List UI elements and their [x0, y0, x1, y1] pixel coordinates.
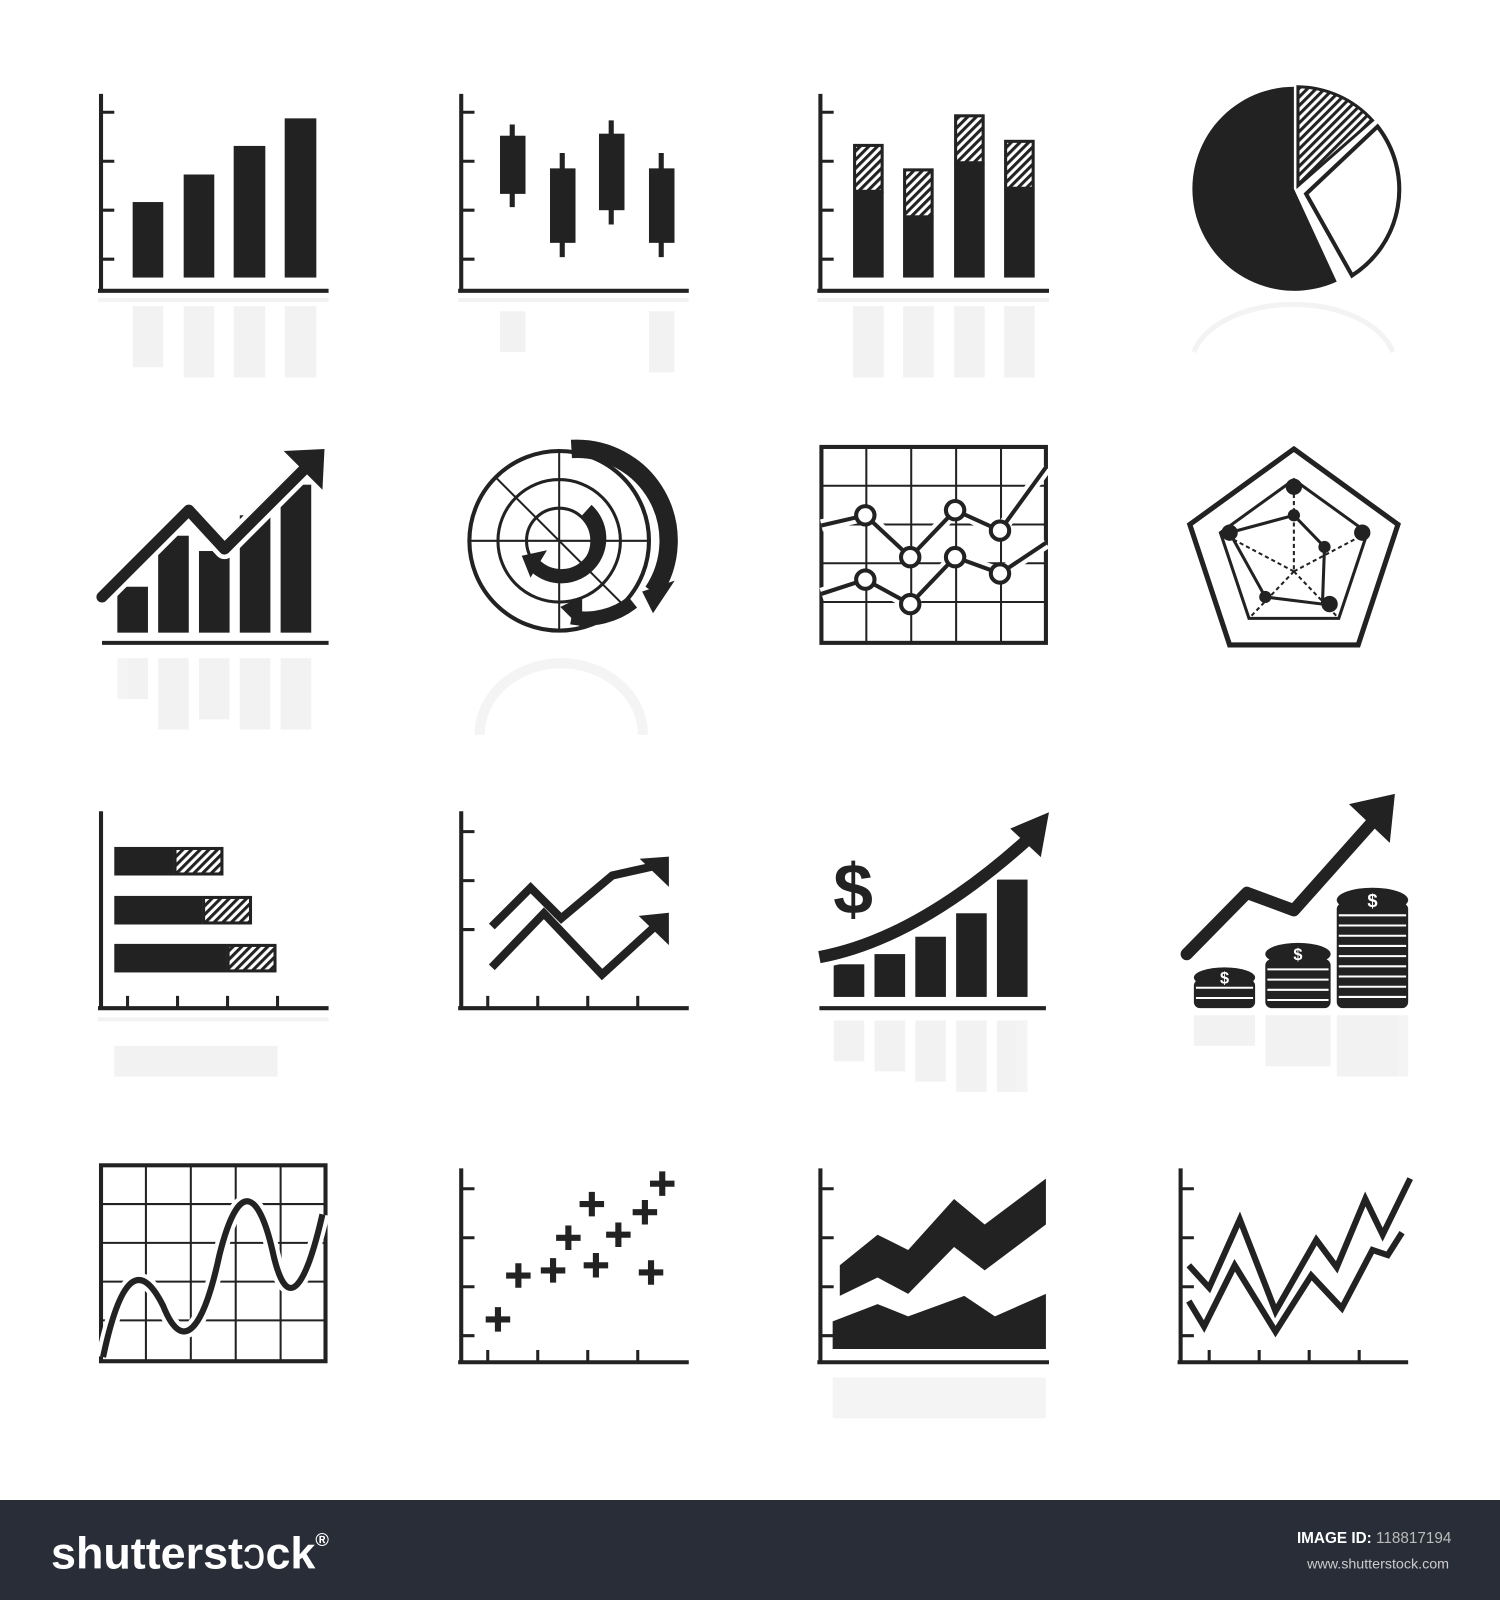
icon: line chart on grid [821, 447, 1046, 643]
icon: dollar growth chart: $ [833, 849, 873, 929]
icon: multi line chart [1178, 1168, 1410, 1362]
icon: coin stacks with arrow: $ [1367, 890, 1378, 911]
icon: radar cycle chart [469, 449, 673, 735]
icon: dollar growth chart [819, 812, 1049, 1092]
icon: stacked bar chart [817, 94, 1049, 378]
icon: bar chart [98, 94, 329, 378]
icon: candlestick chart [458, 94, 689, 372]
icon: horizontal bar chart [98, 811, 329, 1077]
footer image id: IMAGE ID: 118817194 [1297, 1530, 1452, 1547]
icon: area chart [817, 1168, 1049, 1418]
footer logo text: ® [315, 1529, 329, 1550]
icon: coin stacks with arrow: $ [1220, 970, 1229, 988]
icon: pie chart [1192, 87, 1399, 352]
icon: scatter plot [458, 1168, 689, 1362]
icon: double zigzag arrow chart [458, 811, 689, 1008]
icon: coin stacks with arrow [1187, 794, 1408, 1077]
icon: growth bar chart with arrow [102, 449, 329, 730]
icon: radar pentagon chart [1190, 449, 1398, 645]
footer url: www.shutterstock.com [1306, 1556, 1449, 1572]
icon: coin stacks with arrow: $ [1293, 946, 1302, 964]
footer bar [0, 1500, 1500, 1600]
footer logo text: shutterstↄck [51, 1527, 315, 1578]
icon: wave chart on grid [101, 1165, 326, 1361]
